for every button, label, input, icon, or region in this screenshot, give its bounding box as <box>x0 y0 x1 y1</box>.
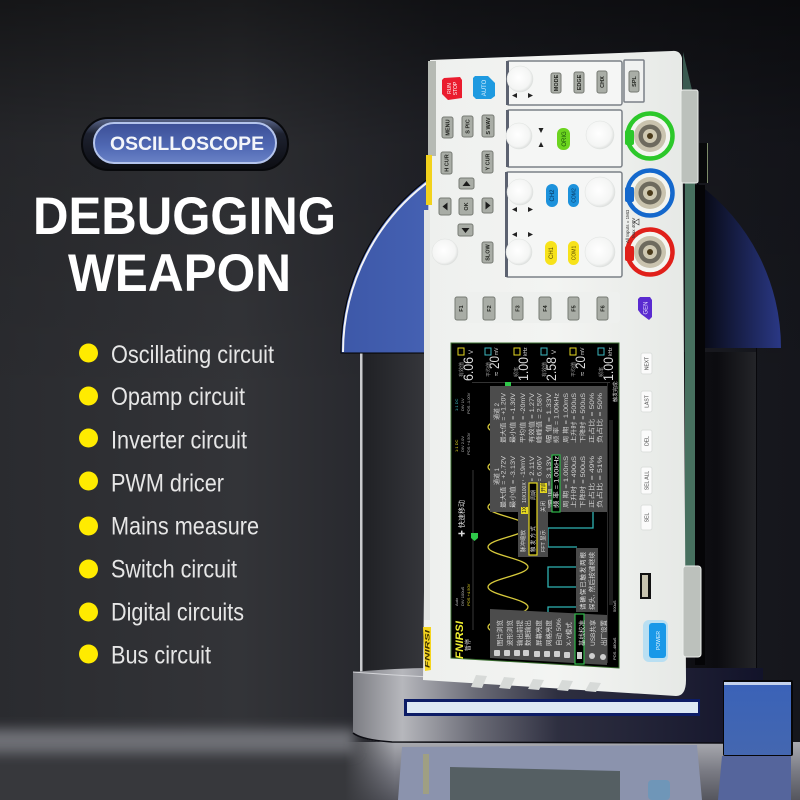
measurement readouts: ≈ <box>578 371 587 376</box>
button: run stop: STOP <box>453 81 459 95</box>
base platform <box>353 668 763 743</box>
grey button labels: S PIC <box>466 119 472 134</box>
button: gen: GEN <box>644 301 650 315</box>
device: oscilloscope <box>423 51 708 696</box>
item: bus circuit: Bus circuit <box>111 642 211 670</box>
right blue arch <box>697 183 781 348</box>
blue cube <box>718 680 793 800</box>
left side trim <box>423 61 436 671</box>
button: ch2: CH2 <box>550 189 556 202</box>
measurement readouts <box>460 347 616 381</box>
right white buttons: NEXT <box>644 357 650 370</box>
grey button labels: F1 <box>459 305 465 312</box>
calibration note <box>576 548 598 612</box>
button: ch2 <box>546 184 558 207</box>
measurement labels: 有效值 <box>458 362 465 377</box>
measurement panel: 峰峰值 = 2.58V <box>536 393 544 443</box>
left system menu: 输出前提 <box>515 620 524 646</box>
badge: oscilloscope: OSCILLOSCOPE <box>110 134 264 155</box>
left system menu: 图片浏览 <box>495 620 504 646</box>
channel status: POS +4.50V <box>466 432 471 455</box>
measurement panel: 最大值 = +1.20V <box>500 393 508 443</box>
measurement panel: 最大值 = +2.72V <box>500 456 508 508</box>
measurement panel: 平均值 = -20mV <box>519 393 527 443</box>
rotated screen text group <box>454 347 619 660</box>
measurement labels: 平均值 <box>485 362 492 377</box>
left system menu: 数据输出 <box>523 620 532 646</box>
left system menu: 波形浏览 <box>505 620 514 646</box>
measurement panel: 最小值 = -3.13V <box>509 456 517 508</box>
left system menu: 自动 50% <box>554 618 563 646</box>
measurement panel: 通道 2 <box>493 402 501 420</box>
popup menu <box>518 481 548 557</box>
measurement readouts: mV <box>494 347 500 355</box>
left system menu <box>490 609 608 665</box>
measurement readouts: V <box>469 350 475 354</box>
screen <box>451 343 619 668</box>
right white buttons <box>641 353 652 530</box>
measurement panel: 频 率 = 1.00kHz <box>552 393 560 443</box>
measurement panel: 通道 1 <box>493 467 501 485</box>
knobs <box>432 66 615 267</box>
left system menu: 基线校准 <box>577 620 586 646</box>
measurement readouts: kHz <box>608 347 614 356</box>
floor reflection of device <box>398 745 702 800</box>
title: DEBUGGING <box>33 187 336 246</box>
floor <box>0 729 800 800</box>
item: PWM driver: PWM dricer <box>111 470 224 498</box>
measurement panel: 下降时 = 500uS <box>579 456 587 508</box>
screen bezel <box>451 343 619 668</box>
measurement readouts: ≈ <box>492 371 501 376</box>
item: inverter circuit: Inverter circuit <box>111 426 247 454</box>
grey button labels: F2 <box>487 305 493 312</box>
connector: blue BNC <box>625 170 672 216</box>
channel status: POS -1.00V <box>466 392 471 414</box>
popup menu: 1X <box>522 506 528 513</box>
connector: green BNC <box>625 114 672 158</box>
left system menu: 屏幕亮度 <box>534 620 543 646</box>
popup menu: FFT 显示 <box>540 530 547 552</box>
color buttons <box>442 76 652 320</box>
popup menu: 100X <box>522 482 528 494</box>
quick move hint: ✚ 快速移动 <box>457 500 466 537</box>
button: com2: COM2 <box>572 188 578 203</box>
calibration note: 探头, 然后按键继续 <box>587 552 596 610</box>
grey buttons <box>439 71 639 320</box>
bottom ridges <box>471 675 601 692</box>
popup menu: 关闭 <box>539 501 547 512</box>
measurement panel: 正占比 = 50% <box>588 392 596 443</box>
small direction arrows <box>512 93 544 237</box>
trigger status: 触发完成: <box>612 381 619 402</box>
button: ch1: CH1 <box>549 246 555 259</box>
button: ch1 <box>545 241 557 265</box>
measurement readouts: kHz <box>523 347 529 356</box>
input rating label: All Inputs = 1MΩ <box>625 209 630 243</box>
button: com1 <box>568 241 579 265</box>
measurement readouts: 20 <box>486 356 502 369</box>
measurement panel: 正占比 = 49% <box>588 455 596 508</box>
measurement panel: 负占比 = 50% <box>596 392 604 443</box>
button: orig: ORIG <box>562 131 568 147</box>
popup menu: 脉冲缩放 <box>519 530 527 552</box>
button: orig <box>557 128 570 150</box>
measurement readouts: 6.06 <box>460 357 476 381</box>
left arch highlight <box>343 179 432 352</box>
grey button labels: F6 <box>600 305 606 312</box>
bullet list <box>79 341 274 670</box>
grey button labels: F5 <box>572 305 578 312</box>
item: opamp circuit: Opamp circuit <box>111 383 245 411</box>
left system menu: X-Y模式 <box>564 622 573 646</box>
measurement panel: 周 期 = 1.00mS <box>562 393 570 443</box>
popup menu: 周期 <box>531 490 537 500</box>
title <box>33 187 336 303</box>
measurement readouts: 1.00 <box>515 357 531 381</box>
right white buttons: SEL <box>644 513 650 522</box>
left side trim: FNIRSI <box>426 629 432 668</box>
item: bus circuit <box>79 642 211 670</box>
calibration note: 请确保已触发两根 <box>578 552 587 610</box>
measurement panel: 峰峰值 = 6.06V <box>536 456 544 508</box>
left system menu: USB共享 <box>588 619 597 646</box>
screen divider and marks <box>471 382 613 663</box>
left system menu: 网格亮度 <box>544 620 553 646</box>
right brackets <box>681 90 701 657</box>
connector: red BNC <box>625 230 672 274</box>
d-pad arrows <box>442 181 490 233</box>
measurement panel: 负占比 = 51% <box>596 455 604 508</box>
measurement panel: 上升时 = 490uS <box>570 456 578 508</box>
item: mains measure: Mains measure <box>111 512 259 540</box>
right white buttons: LAST <box>644 395 650 408</box>
waveform: cyan square <box>548 500 593 622</box>
button: com1: COM1 <box>572 246 578 260</box>
channel status: DIV 2.0V <box>460 436 465 452</box>
channel status: POS +4.50V <box>466 583 471 606</box>
grey button labels <box>444 74 638 312</box>
measurement panel: 频 率 = 1.00kHz <box>552 456 560 508</box>
device body <box>423 51 686 696</box>
measurement panel: 有效值 = 1.27V <box>528 393 536 443</box>
waveform: yellow sine <box>488 384 528 647</box>
USB port <box>640 573 651 599</box>
button: run stop <box>442 77 462 100</box>
measurement labels: 频率 <box>513 367 520 377</box>
popup menu: 触发方式 <box>529 526 537 552</box>
channel status <box>454 392 471 606</box>
button: run stop: RUN <box>447 83 453 94</box>
popup menu: 开启 <box>540 482 547 492</box>
measurement panel: 上升时 = 500uS <box>570 393 578 443</box>
measurement readouts: V <box>552 350 558 354</box>
button: gen <box>638 297 652 320</box>
measurement labels: 平均值 <box>570 362 577 377</box>
grey button labels: EDGE <box>577 74 583 90</box>
title: WEAPON <box>68 244 291 303</box>
pause status: 暂停 <box>464 639 472 651</box>
channel status: Auto <box>454 597 459 606</box>
power button <box>643 620 668 662</box>
channel status: 1:1 DC <box>454 398 459 411</box>
item: oscillating circuit: Oscillating circuit <box>111 341 274 369</box>
measurement panel: 下降时 = 500uS <box>579 393 587 443</box>
grey button labels: CHX <box>600 76 606 88</box>
badge: oscilloscope <box>82 118 288 170</box>
left system menu: 出厂设置 <box>599 620 608 646</box>
measurement panel: 平均值 = -19mV <box>519 456 527 508</box>
panel dark left edges <box>505 61 509 277</box>
right white buttons: DEL <box>644 436 650 446</box>
grey button labels: F4 <box>543 304 549 312</box>
measurement panel <box>490 386 607 512</box>
measurement panel: 幅 值 = 3.13V <box>545 456 553 508</box>
item: switch circuit: Switch circuit <box>111 556 237 584</box>
measurement panel: 最小值 = -1.30V <box>509 393 517 443</box>
measurement panel: 幅 值 = 1.33V <box>545 393 553 443</box>
control panel frames <box>450 60 644 323</box>
grey button labels: SLOW <box>486 243 492 261</box>
measurement readouts: 20 <box>572 356 588 369</box>
measurement labels: 频率 <box>598 367 605 377</box>
channel status: DIV 1V <box>460 398 465 411</box>
left blue arch <box>341 176 432 353</box>
measurement panel: 周 期 = 1.00mS <box>562 456 570 508</box>
channel status: DIV 100uS <box>460 586 465 606</box>
grey button labels: SPL <box>632 76 638 87</box>
stage backdrop: cylinder <box>360 348 757 677</box>
brand logo: FNIRSI <box>454 620 466 659</box>
right white buttons: SEL ALL <box>644 471 650 490</box>
measurement labels <box>458 362 605 377</box>
button: auto <box>473 76 495 99</box>
power button: POWER <box>656 631 662 650</box>
rotated screen text group: 500uS <box>612 600 617 612</box>
timebase status: POS -480uS <box>612 637 617 660</box>
side rail and shadow <box>683 52 708 665</box>
grey button labels: F3 <box>516 305 522 312</box>
grey button labels: S WAV <box>486 117 492 135</box>
button: com2 <box>568 184 579 207</box>
measurement readouts: 2.58 <box>543 357 559 381</box>
grey button labels: OK <box>464 202 470 211</box>
measurement panel: 有效值 = 2.11V <box>528 456 536 508</box>
measurement readouts: 1.00 <box>600 357 616 381</box>
channel status: 1:1 DC <box>454 439 459 452</box>
item: PWM driver <box>79 470 224 498</box>
measurement readouts: mV <box>580 347 586 355</box>
channel tags <box>458 348 604 355</box>
grey button labels: MODE <box>554 74 560 91</box>
item: digital circuits: Digital circuits <box>111 598 244 626</box>
grey button labels: MENU <box>446 119 452 136</box>
input rating label <box>625 209 639 243</box>
input rating label: Max 400V <box>631 218 636 238</box>
measurement labels: 有效值 <box>541 362 548 377</box>
button: auto: AUTO <box>482 79 488 96</box>
popup menu: 10X <box>522 493 528 503</box>
grey button labels: Y CUR <box>486 153 492 171</box>
grey button labels: H CUR <box>444 154 450 172</box>
